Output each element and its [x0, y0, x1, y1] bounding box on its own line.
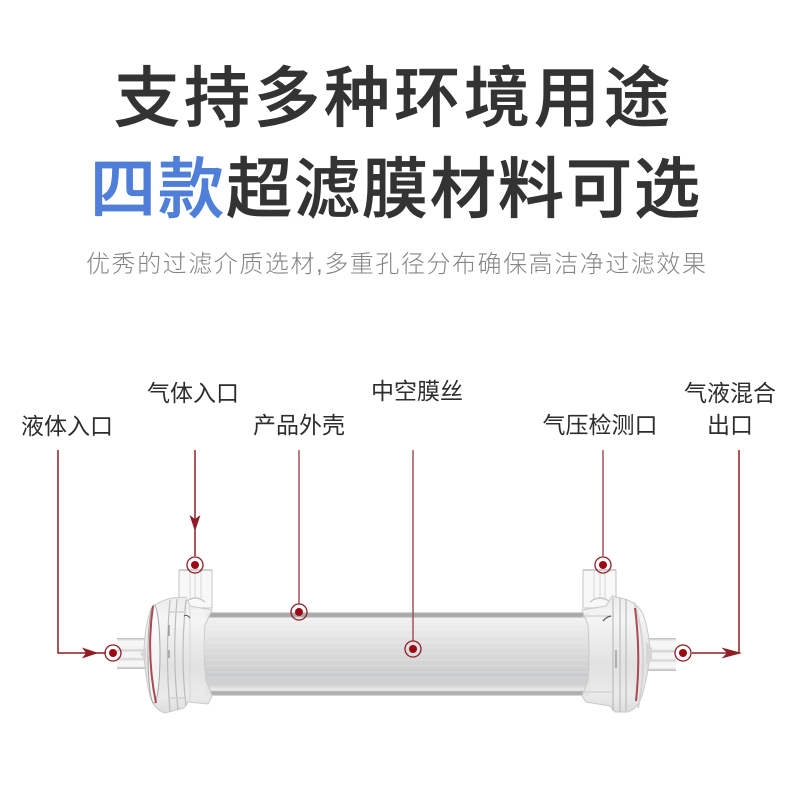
label: liquid inlet: 液体入口	[21, 413, 113, 439]
main tube with striations	[205, 612, 590, 696]
marker: housing	[291, 604, 307, 620]
right nozzle	[646, 638, 676, 671]
callout line: liquid inlet with arrow	[58, 450, 106, 657]
marker: liquid inlet	[105, 645, 121, 661]
callout line: housing	[298, 450, 300, 604]
left side port	[179, 570, 212, 608]
callout line: pressure port	[602, 450, 604, 556]
callout line: membrane	[412, 450, 414, 641]
title line 1: 支持多种环境用途	[114, 61, 674, 135]
label: pressure port: 气压检测口	[542, 412, 658, 438]
subtitle: 优秀的过滤介质选材,多重孔径分布确保高洁净过滤效果	[86, 251, 706, 278]
label: gas-liquid outlet: 出口	[707, 412, 753, 438]
marker: gas inlet	[187, 557, 203, 573]
left nozzle	[117, 638, 147, 669]
marker: pressure port	[595, 557, 611, 573]
marker: outlet	[675, 645, 691, 661]
marker: membrane	[405, 641, 421, 657]
label: product housing: 产品外壳	[253, 412, 345, 438]
left end cap	[140, 597, 212, 713]
callout line: gas inlet with arrow	[191, 450, 199, 556]
right end cap	[582, 596, 652, 712]
callout line: outlet with arrow	[692, 450, 739, 657]
label: hollow fiber membrane: 中空膜丝	[371, 378, 463, 404]
label: gas inlet: 气体入口	[147, 380, 239, 406]
filter cartridge illustration	[117, 570, 676, 713]
label: gas-liquid outlet: 气液混合	[684, 380, 776, 406]
right side port	[583, 570, 616, 608]
title line 2: 四款超滤膜材料可选	[90, 152, 702, 226]
